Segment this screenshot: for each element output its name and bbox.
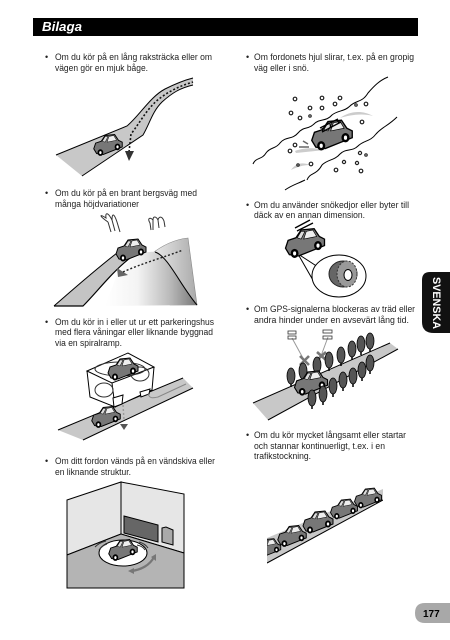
illustration: car on bumpy snowy road (253, 77, 397, 190)
tab label: SVENSKA (430, 277, 442, 329)
text: slow traffic: trafikstockning. (254, 451, 311, 461)
text: snow chains: däck av en annan dimension. (254, 210, 365, 220)
text: slow traffic (246, 430, 406, 461)
text: long straight road (45, 52, 212, 73)
text: parking garage: Om du kör in i eller ut ur ett parkeringshus (55, 317, 214, 327)
illustration: traffic jam (255, 488, 383, 563)
illustration: parking garage and road (58, 353, 193, 440)
text: slow traffic: Om du kör mycket långsamt eller startar (254, 430, 406, 440)
text: turntable (45, 456, 215, 477)
illustration: car with tire callout (286, 220, 366, 297)
text: mountain road (45, 188, 197, 209)
text: slippery wheels (246, 52, 414, 73)
text: long straight road: • (45, 52, 48, 62)
text: turntable: • (45, 456, 48, 466)
text: long straight road: vägen gör en mjuk båge. (55, 63, 148, 73)
text: parking garage: • (45, 317, 48, 327)
text: long straight road: Om du kör på en lång raksträcka eller om (55, 52, 212, 62)
illustration: turntable room (67, 482, 184, 588)
text: GPS signals blocked: andra hinder under en avsevärt lång tid. (254, 315, 409, 325)
text: GPS signals blocked: • (246, 304, 249, 314)
page number (415, 603, 450, 623)
text: slow traffic: • (246, 430, 249, 440)
text: snow chains: Om du använder snökedjor eller byter till (254, 200, 409, 210)
text: turntable: en liknande struktur. (55, 467, 131, 477)
title: Bilaga (42, 20, 82, 34)
page number: 177 (423, 609, 440, 620)
text: mountain road: många höjdvariationer (55, 199, 139, 209)
tab: SVENSKA (422, 272, 450, 333)
illustration: blocked GPS and trees (253, 330, 398, 420)
text: snow chains (246, 200, 409, 220)
text: snow chains: • (246, 200, 249, 210)
text: mountain road: • (45, 188, 48, 198)
header bar (33, 18, 418, 36)
text: GPS signals blocked: Om GPS-signalerna blockeras av träd eller (254, 304, 415, 314)
text: parking garage (45, 317, 214, 348)
text: turntable: Om ditt fordon vänds på en vändskiva eller (55, 456, 215, 466)
text: mountain road: Om du kör på en brant bergsväg med (55, 188, 197, 198)
text: slippery wheels: • (246, 52, 249, 62)
text: slippery wheels: Om fordonets hjul slirar, t.ex. på en gropig (254, 52, 414, 62)
illustration: curved road (56, 78, 193, 176)
text: GPS signals blocked (246, 304, 415, 325)
text: slippery wheels: väg eller i snö. (254, 63, 309, 73)
text: parking garage: med flera våningar eller liknande byggnad (55, 327, 213, 337)
illustration: mountain road (54, 214, 197, 306)
text: parking garage: via en spiralramp. (55, 338, 122, 348)
text: slow traffic: och stannar kontinuerligt, t.ex. i en (254, 441, 385, 451)
